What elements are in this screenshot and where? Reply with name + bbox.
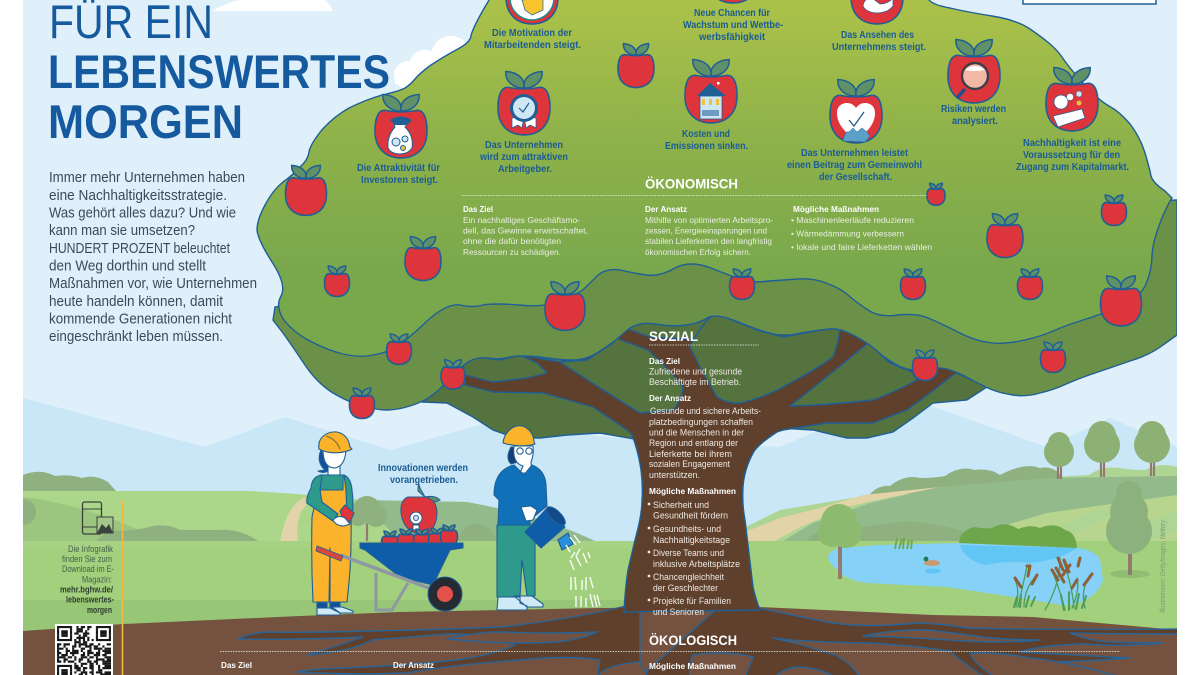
apple (441, 360, 465, 389)
caption: investors: Investoren steigt. (361, 175, 438, 186)
apple (912, 350, 938, 380)
text: approach: Der Ansatz (649, 393, 691, 403)
landscape: hills (10, 465, 1177, 541)
text: approach: ökonomischen Erfolg sichern. (645, 247, 751, 257)
intro text: eingeschränkt leben müssen. (49, 329, 223, 345)
panel: ökologisch (220, 632, 1120, 671)
text: approach: Lieferkette bei ihrem (649, 449, 732, 459)
text: download note: Die Infografik (68, 544, 114, 554)
text: approach (649, 393, 761, 480)
pond (828, 524, 1103, 610)
tree: lower canopy, darkest layer (421, 318, 986, 440)
heading: sozial: SOZIAL (649, 328, 698, 344)
intro text: kommende Generationen nicht (49, 312, 232, 328)
text: approach: zessen, Energieeinsparungen und (645, 226, 767, 236)
intro text: Immer mehr Unternehmen haben (49, 170, 245, 186)
text: approach: unterstützen. (649, 470, 700, 480)
intro text: HUNDERT PROZENT beleuchtet (49, 241, 230, 257)
caption: innovations (378, 463, 468, 486)
clouds (213, 0, 471, 89)
caption: capital market: Voraussetzung für den (1023, 150, 1120, 161)
text: download note: lebenswertes- (66, 594, 114, 604)
wheelbarrow with apples (316, 485, 463, 611)
text: download note: Download im E- (62, 564, 114, 574)
icon: phone with image (82, 502, 113, 534)
text: measures: Gesundheit fördern (653, 510, 728, 520)
icon apple: costs and emissions (685, 59, 737, 123)
apples in wheelbarrow (382, 525, 458, 552)
text: approach: Region und entlang der (649, 438, 738, 448)
text: goal: Das Ziel (463, 204, 493, 214)
caption: employer: wird zum attraktiven (479, 152, 568, 163)
text: measures: Sicherheit und (653, 500, 709, 510)
text: measures: Chancengleichheit (653, 572, 725, 582)
text: goal: ohne die dafür benötigten (463, 236, 561, 246)
heading: ökonomisch: ÖKONOMISCH (645, 176, 738, 192)
text: measures: der Geschlechter (653, 583, 718, 593)
icon: reeds (1014, 558, 1092, 610)
apple (350, 388, 374, 418)
caption: risks: analysiert. (952, 116, 998, 127)
figure: woman with apple (307, 432, 354, 615)
panel: ökonomisch (462, 176, 932, 257)
caption: motivation (484, 28, 581, 51)
label: approach: Der Ansatz (393, 660, 434, 670)
QR code (55, 624, 113, 675)
caption: reputation: Das Ansehen des (841, 30, 914, 41)
apple (618, 44, 654, 88)
caption: costs (665, 129, 748, 152)
intro text (49, 170, 257, 345)
text: measures: inklusive Arbeitsplätze (653, 559, 740, 569)
text: goal: Das Ziel (649, 356, 680, 366)
text: goal (649, 356, 742, 387)
tree: trunk and branches (465, 313, 957, 612)
background: distant mountains (23, 398, 1177, 541)
text: approach: stabilen Lieferketten den langfristig (645, 236, 772, 246)
caption: growth (683, 8, 783, 43)
icon apple: investors (375, 94, 427, 158)
trees: landscape (348, 421, 1170, 579)
title: MORGEN (48, 95, 243, 148)
background: sky (23, 0, 1177, 450)
wheelbarrow handle (340, 555, 445, 594)
caption: investors (357, 163, 440, 186)
wheel (428, 577, 462, 611)
text: measures: Mögliche Maßnahmen (649, 486, 736, 496)
caption: common good: Das Unternehmen leistet (801, 148, 909, 159)
apple (545, 282, 585, 330)
text: download note: morgen (87, 605, 112, 615)
text: measures (648, 486, 740, 617)
ground (23, 607, 1177, 675)
text: measures: Nachhaltigkeitstage (653, 535, 730, 545)
heading: ökologisch: ÖKOLOGISCH (649, 632, 737, 648)
apple (987, 214, 1023, 258)
caption: growth: werbsfähigkeit (698, 32, 766, 43)
caption: capital market: Nachhaltigkeit ist eine (1023, 138, 1121, 149)
text: download note: finden Sie zum (62, 554, 112, 564)
text: measures: • lokale und faire Lieferketten wählen (791, 242, 932, 252)
apple captions (357, 8, 1129, 486)
caption: risks (941, 104, 1006, 127)
apple (730, 269, 754, 300)
wheelbarrow bin (360, 543, 463, 585)
apple (927, 183, 945, 205)
caption: costs: Kosten und (682, 129, 730, 140)
intro text: Was gehört alles dazu? Und wie (49, 206, 236, 222)
apple (286, 165, 326, 215)
icon apple: risks (948, 39, 1000, 103)
intro text: kann man sie umsetzen? (49, 223, 195, 239)
icon apple: common good (830, 79, 882, 143)
text: approach: Gesunde und sichere Arbeits- (650, 406, 761, 416)
text: measures: • Maschinenleerläufe reduzieren (791, 215, 914, 225)
icon: watering can (525, 504, 573, 550)
text: download note: Magazin: (82, 574, 112, 584)
text: goal (463, 204, 588, 257)
text: approach: Der Ansatz (645, 204, 687, 214)
caption: capital market (1016, 138, 1129, 173)
apple (1100, 276, 1142, 326)
caption: capital market: Zugang zum Kapitalmarkt. (1016, 162, 1129, 173)
text: approach (645, 204, 773, 257)
tree: upper canopy (257, 0, 1172, 356)
landscape: foreground meadow (23, 541, 1177, 628)
text: download note (60, 544, 114, 615)
icon apple: capital market (1046, 67, 1098, 131)
label: measures: Mögliche Maßnahmen (649, 661, 736, 671)
left side panel: download note (55, 501, 122, 675)
icon apple: reputation (851, 0, 903, 24)
text: approach: und die Menschen in der (649, 428, 744, 438)
text: measures: und Senioren (653, 607, 704, 617)
text: measures: Projekte für Familien (653, 596, 731, 606)
tree: dark foliage pockets between branches (463, 313, 917, 413)
icon apple: attractive employer (498, 71, 550, 135)
water drops (566, 535, 600, 607)
icon: duck (924, 557, 941, 574)
icon apple: motivation (506, 0, 558, 24)
title (48, 0, 390, 148)
caption: growth: Wachstum und Wettbe- (683, 20, 783, 31)
caption: risks: Risiken werden (941, 104, 1006, 115)
icon: big apple with bulb (401, 485, 440, 533)
intro text: den Weg dorthin und stellt (49, 258, 206, 274)
text: approach: sozialen Engagement (649, 459, 731, 469)
text: measures (791, 204, 932, 252)
caption: common good (787, 148, 922, 183)
wheelbarrow legs (376, 573, 408, 610)
label: goal: Das Ziel (221, 660, 252, 670)
caption: employer (479, 140, 568, 175)
caption: innovations: vorangetrieben. (390, 475, 458, 486)
text: measures: Mögliche Maßnahmen (793, 204, 879, 214)
text: approach: Mithilfe von optimierten Arbeitspro- (645, 215, 773, 225)
caption: costs: Emissionen sinken. (665, 141, 748, 152)
caption: motivation: Die Motivation der (492, 28, 572, 39)
caption: motivation: Mitarbeitenden steigt. (484, 40, 581, 51)
apple (900, 269, 926, 300)
caption: reputation (832, 30, 926, 53)
text: goal: dell, das Gewinne erwirtschaftet, (463, 226, 588, 236)
roots (238, 606, 1180, 675)
apple (405, 237, 441, 281)
apple (324, 266, 350, 296)
caption: growth: Neue Chancen für (694, 8, 770, 19)
text: goal: Ressourcen zu schädigen. (463, 247, 561, 257)
intro text: heute handeln können, damit (49, 294, 223, 310)
text: measures: Gesundheits- und (653, 524, 721, 534)
figure: man with watering can (494, 426, 573, 610)
tree: middle canopy band (273, 200, 1177, 410)
apple (1102, 195, 1126, 226)
text: goal: Ein nachhaltiges Geschäftsmo- (463, 215, 580, 225)
panel: sozial (648, 328, 761, 617)
top-right box (1023, 0, 1156, 4)
caption: investors: Die Attraktivität für (357, 163, 440, 174)
apple (1040, 342, 1066, 372)
accent line (122, 501, 124, 675)
icon apple: growth (707, 0, 759, 3)
caption: reputation: Unternehmens steigt. (832, 42, 926, 53)
caption: common good: einen Beitrag zum Gemeinwohl (787, 160, 922, 171)
apple (386, 334, 412, 364)
text: approach: platzbedingungen schaffen (649, 417, 753, 427)
intro text: Maßnahmen vor, wie Unternehmen (49, 276, 257, 292)
apple (1018, 269, 1042, 300)
title: LEBENSWERTES (48, 45, 390, 98)
text: goal: Zufriedene und gesunde (649, 366, 742, 376)
text: download note: mehr.bghw.de/ (60, 584, 113, 594)
plain apples (286, 44, 1142, 418)
text: measures: Diverse Teams und (653, 548, 724, 558)
caption: innovations: Innovationen werden (378, 463, 468, 474)
credit line: Illustrationen: GettyImages, Nettory (1158, 519, 1167, 613)
caption: employer: Das Unternehmen (485, 140, 563, 151)
intro text: eine Nachhaltigkeitsstrategie. (49, 188, 227, 204)
text: goal: Beschäftigte im Betrieb. (649, 377, 741, 387)
caption: common good: der Gesellschaft. (819, 172, 892, 183)
text: measures: • Wärmedämmung verbessern (791, 228, 904, 238)
caption: employer: Arbeitgeber. (498, 164, 552, 175)
